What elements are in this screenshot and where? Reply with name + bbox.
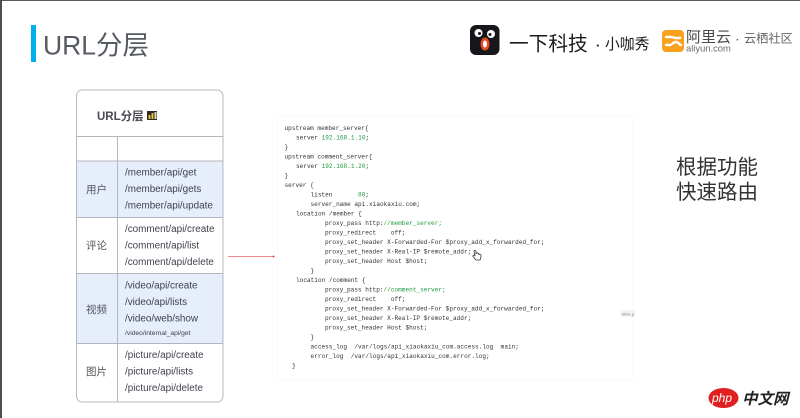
panel: nginx config code: } [284, 172, 288, 180]
panel: nginx config code: listen 80; [310, 192, 369, 198]
panel: nginx config code: upstream member_server{ [284, 125, 369, 132]
panel: nginx config code: proxy_redirect off; [325, 230, 405, 236]
row: video: /video/api/create [125, 280, 198, 292]
row: pictures: 图片 [86, 365, 107, 378]
logo: aliyun: 阿里云 [686, 29, 731, 46]
icon: hand cursor [473, 250, 481, 260]
panel: nginx config code: proxy_set_header X-Real-IP $remote_addr; [325, 315, 471, 322]
panel: nginx config code: error_log /var/logs/api_xiaokaxiu_com.error.log; [310, 353, 490, 360]
row: pictures [86, 350, 204, 394]
logo: yixia technology: 一下科技 [509, 34, 588, 56]
logo: yixia technology: 小咖秀 [605, 36, 650, 53]
panel: nginx config code: location /member { [296, 210, 362, 218]
row: comments [86, 224, 215, 268]
row: users: /member/api/get [125, 168, 197, 178]
arrow: table to config [228, 256, 274, 258]
panel: nginx config code: proxy_redirect off; [325, 296, 405, 303]
panel: nginx config code: location /comment { [296, 277, 366, 284]
icon: aliyun orange badge [662, 30, 684, 52]
row: comments: /comment/api/create [125, 224, 215, 235]
panel: URL layer table [76, 90, 223, 402]
table heading [97, 109, 157, 123]
row: video: /video/web/show [125, 314, 199, 324]
panel: nginx config code: proxy_set_header X-Real-IP $remote_addr; [325, 248, 471, 256]
panel: nginx config code: server 192.168.1.10; [296, 134, 369, 142]
row: pictures: /picture/api/delete [125, 383, 203, 394]
panel: nginx config code: server { [284, 182, 314, 189]
logo: aliyun: · [736, 35, 739, 46]
watermark: php chinese site [708, 388, 791, 408]
panel: nginx config code: proxy_set_header Host $host; [325, 324, 427, 332]
row: users [86, 168, 213, 212]
row: video: 视频 [86, 303, 107, 316]
watermark: php chinese site: 中文网 [742, 390, 791, 408]
row: video [86, 280, 199, 337]
panel: nginx config code: } [310, 268, 314, 274]
panel: nginx config code: proxy_pass http://member_server; [325, 220, 442, 227]
side note: 根据功能 [676, 156, 758, 179]
panel: nginx config code: server_name api.xiaokaxiu.com; [310, 201, 420, 208]
row: pictures: /picture/api/lists [125, 366, 193, 378]
panel: nginx config code: proxy_set_header X-Forwarded-For $proxy_add_x_forwarded_for; [325, 239, 544, 246]
icon: yixia face [470, 25, 500, 55]
title: URL分层 [43, 30, 149, 60]
side note: 快速路由 [676, 181, 758, 204]
small side tab [620, 310, 635, 317]
panel: nginx config code: upstream comment_server{ [284, 154, 373, 160]
panel: nginx config code: } [292, 362, 296, 370]
row: comments: 评论 [86, 239, 107, 252]
row: comments: /comment/api/delete [125, 257, 214, 268]
row: video: /video/internal_api/get [125, 330, 191, 337]
logo: yixia technology [470, 25, 650, 56]
side note [676, 156, 758, 204]
panel: nginx config code [278, 116, 632, 380]
panel: nginx config code: proxy_set_header Host $host; [325, 258, 427, 265]
small side tab: html..p [622, 312, 635, 316]
panel: nginx config code: server 192.168.1.20; [296, 163, 369, 170]
panel: nginx config code: proxy_set_header X-Forwarded-For $proxy_add_x_forwarded_for; [325, 306, 544, 312]
row: users: /member/api/gets [125, 184, 201, 195]
logo: aliyun [662, 29, 793, 54]
table heading: URL分层 [97, 109, 144, 123]
logo: yixia technology: · [596, 38, 600, 53]
logo: aliyun: 云栖社区 [744, 30, 793, 46]
row: users: 用户 [86, 183, 107, 196]
watermark: php chinese site: php [711, 391, 732, 405]
row: pictures: /picture/api/create [125, 350, 204, 361]
panel: nginx config code: access_log /var/logs/api_xiaokaxiu_com.access.log main; [310, 344, 519, 350]
panel: nginx config code: proxy_pass http://comment_server; [325, 286, 446, 294]
panel: nginx config code: } [310, 334, 314, 341]
panel: nginx config code: } [284, 144, 288, 151]
row: users: /member/api/update [125, 200, 213, 212]
row: video: /video/api/lists [125, 297, 187, 308]
row: comments: /comment/api/list [125, 240, 199, 252]
logo: aliyun: aliyun.com [686, 42, 731, 54]
